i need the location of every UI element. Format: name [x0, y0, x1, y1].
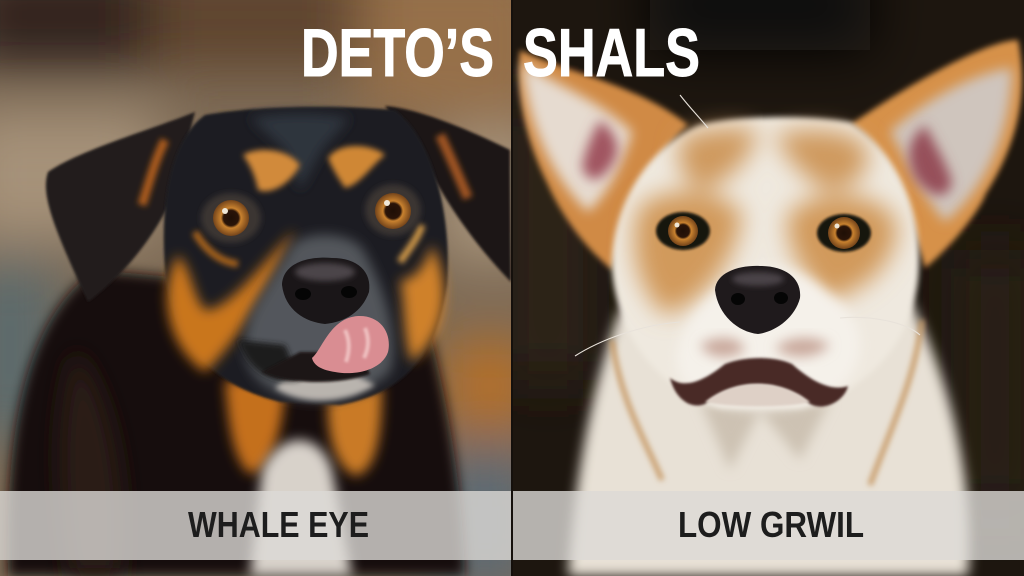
right dog head: [612, 117, 919, 408]
head sheen: [250, 114, 350, 190]
right caption text: LOW GRWIL: [678, 504, 864, 545]
title: [301, 15, 700, 91]
right dog left ear: [519, 50, 688, 270]
right dog right ear: [850, 40, 1022, 268]
left dog nose: [282, 258, 369, 324]
right dog nose: [715, 266, 800, 334]
left caption band: [0, 491, 511, 560]
muzzle right: [677, 267, 860, 409]
left dog body: [8, 270, 465, 576]
head: [164, 107, 448, 405]
right ear: [385, 106, 511, 282]
right caption band: [513, 491, 1024, 560]
title: SHALS: [523, 15, 700, 91]
title: DETO’S: [301, 15, 494, 91]
panel: right dog photo: [513, 0, 1024, 576]
muzzle shading: [700, 338, 830, 357]
whiskers: [575, 95, 920, 356]
forehead and eye patches: [634, 128, 897, 315]
cheek tan: [167, 146, 444, 372]
chest markings: [225, 380, 382, 576]
left caption text: WHALE EYE: [188, 504, 369, 545]
panel: left dog photo: [0, 0, 550, 576]
right dog body: [568, 300, 969, 576]
left dog mouth and tongue: [262, 352, 370, 382]
left ear: [46, 112, 195, 302]
left dog eyes: [201, 184, 421, 243]
muzzle: [245, 235, 393, 400]
right dog eyes: [656, 212, 871, 252]
right dog mouth: [670, 358, 848, 407]
